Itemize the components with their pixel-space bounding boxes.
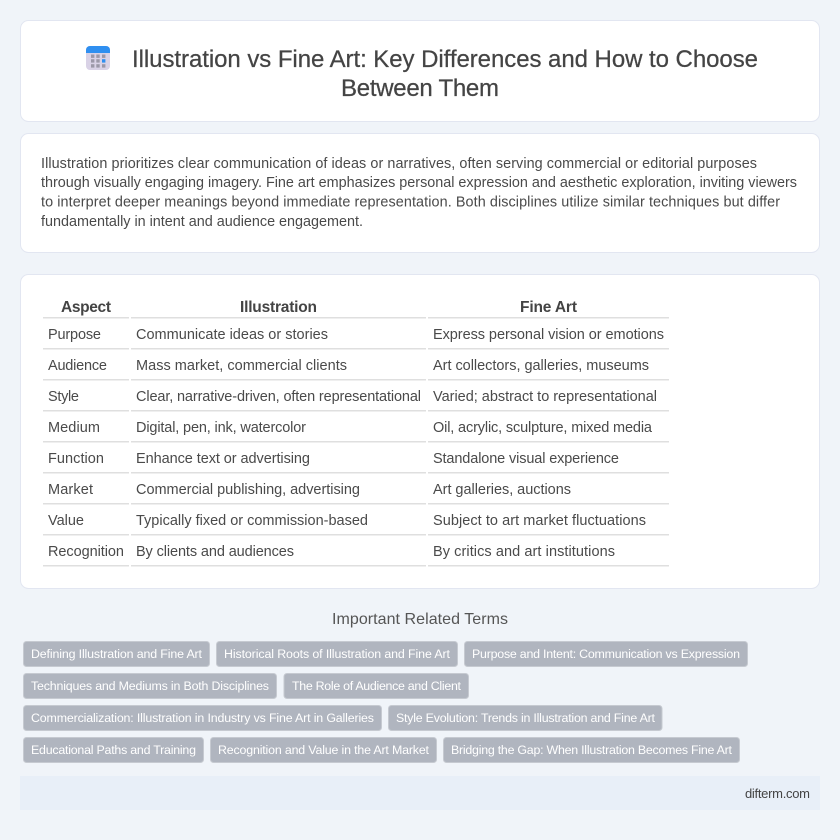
row: Function: Enhance text or advertising: [136, 451, 310, 467]
row: Purpose: [48, 327, 664, 343]
chip: [464, 642, 748, 666]
chip: Historical Roots of Illustration and Fine Art: [224, 647, 451, 661]
intro paragraph: fundamentally in intent and audience engagement.: [41, 214, 363, 230]
row: Recognition: [48, 544, 615, 560]
row: Market: Commercial publishing, advertising: [136, 482, 360, 498]
row: Function: Function: [48, 451, 104, 467]
chip: [24, 674, 276, 698]
chip: [388, 706, 662, 730]
row: Market: [48, 482, 571, 498]
row: Medium: Oil, acrylic, sculpture, mixed media: [433, 420, 653, 436]
row: Style: Varied; abstract to representational: [433, 389, 657, 405]
row: Function: Standalone visual experience: [433, 451, 619, 467]
title: [132, 46, 758, 102]
chip: Defining Illustration and Fine Art: [31, 647, 203, 661]
related term chips: [24, 642, 748, 762]
row: Style: [48, 389, 657, 405]
intro paragraph: [41, 156, 797, 230]
chip: Commercialization: Illustration in Industry vs Fine Art in Galleries: [31, 711, 374, 725]
chip: Bridging the Gap: When Illustration Becomes Fine Art: [451, 743, 733, 757]
row: Purpose: Communicate ideas or stories: [136, 327, 328, 343]
row: Audience: [48, 358, 649, 374]
row: Medium: Digital, pen, ink, watercolor: [136, 420, 306, 436]
row: Value: Typically fixed or commission-based: [136, 513, 368, 529]
footer bar: [20, 776, 820, 810]
chip: Recognition and Value in the Art Market: [218, 743, 430, 757]
chip: Style Evolution: Trends in Illustration and Fine Art: [396, 711, 656, 725]
row: Recognition: By clients and audiences: [136, 544, 294, 560]
row: Value: Subject to art market fluctuations: [433, 513, 646, 529]
table header: [61, 299, 577, 316]
chip: Educational Paths and Training: [31, 743, 196, 757]
row: Style: Style: [48, 389, 79, 405]
panel: comparison table: [20, 274, 820, 588]
chip: [284, 674, 468, 698]
row: Value: [48, 513, 646, 529]
row: Recognition: Recognition: [48, 544, 124, 560]
row: Style: Clear, narrative-driven, often representational: [136, 389, 421, 405]
title: Illustration vs Fine Art: Key Differences and How to Choose: [132, 46, 758, 73]
table header: Fine Art: [520, 299, 577, 316]
row: Medium: [48, 420, 653, 436]
row: Purpose: Purpose: [48, 327, 101, 343]
panel: header: [20, 20, 820, 122]
table header: Aspect: [61, 299, 111, 316]
row: Function: [48, 451, 619, 467]
chip: [444, 738, 740, 762]
chip: [24, 738, 204, 762]
chip: The Role of Audience and Client: [292, 679, 462, 693]
row: Value: Value: [48, 513, 84, 529]
chip: Purpose and Intent: Communication vs Expression: [472, 647, 740, 661]
row: Recognition: By critics and art institutions: [433, 544, 615, 560]
intro paragraph: through visually engaging imagery. Fine art emphasizes personal expression and aesthetic exploration, inviting viewers: [41, 175, 797, 191]
intro paragraph: to interpret deeper meanings beyond immediate representation. Both disciplines utilize similar techniques but differ: [41, 194, 780, 210]
row: Audience: Mass market, commercial clients: [136, 358, 347, 374]
row: Audience: Audience: [48, 358, 107, 374]
panel: intro text: [20, 134, 820, 252]
row: Market: Market: [48, 482, 93, 498]
row: Audience: Art collectors, galleries, museums: [433, 358, 649, 374]
intro paragraph: Illustration prioritizes clear communication of ideas or narratives, often serving commercial or editorial purposes: [41, 156, 757, 172]
chip: [210, 738, 436, 762]
row: Medium: Medium: [48, 420, 100, 436]
footer bar: difterm.com: [745, 786, 810, 801]
row: Market: Art galleries, auctions: [433, 482, 571, 498]
heading: related terms: Important Related Terms: [332, 611, 508, 628]
chip: [24, 706, 382, 730]
chip: Techniques and Mediums in Both Disciplines: [31, 679, 269, 693]
row: Purpose: Express personal vision or emotions: [433, 327, 664, 343]
icon: calendar: [86, 46, 110, 70]
table header: Illustration: [240, 299, 317, 316]
chip: [24, 642, 210, 666]
title: Between Them: [341, 75, 499, 102]
chip: [216, 642, 458, 666]
